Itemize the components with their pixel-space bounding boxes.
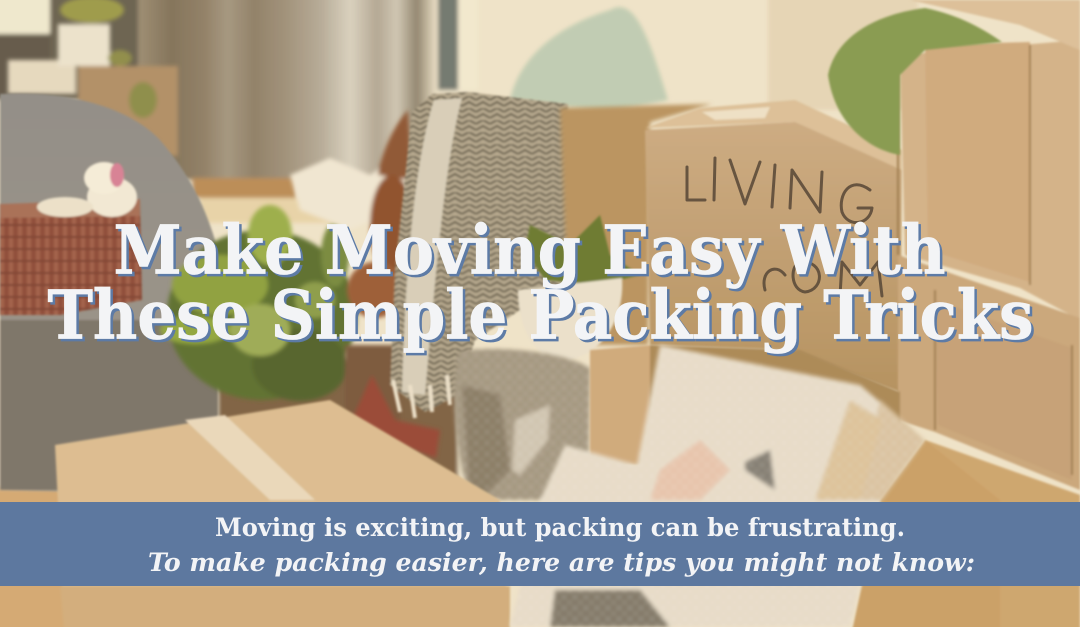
plush toy and cushion behind blanket	[290, 110, 440, 458]
banner background	[0, 502, 1080, 586]
banner line 1: Moving is exciting, but packing can be frustrating.	[215, 513, 905, 542]
shelf items top left	[8, 0, 178, 156]
armchair	[0, 93, 218, 495]
title text	[48, 210, 1034, 354]
basket with plush	[0, 162, 142, 315]
box middle lower	[590, 345, 900, 470]
banner line 2: To make packing easier, here are tips you might not know:	[148, 548, 975, 577]
right stacked boxes	[898, 0, 1080, 490]
green knit blanket	[828, 8, 1002, 155]
handwriting on box	[687, 158, 882, 296]
green plant	[160, 205, 357, 401]
striped blanket	[390, 92, 570, 418]
bubble wrap stool	[454, 349, 590, 500]
large front box	[55, 400, 510, 627]
middle box behind plant	[560, 104, 712, 345]
title shadow: Make Moving Easy With	[116, 213, 948, 292]
title shadow	[50, 213, 1036, 357]
teal pillow	[510, 7, 668, 112]
lower right box	[850, 440, 1080, 627]
bubble wrap package	[510, 345, 925, 627]
title text: Make Moving Easy With	[114, 210, 946, 290]
potted plant on stool	[518, 215, 640, 360]
living room box	[645, 100, 902, 392]
